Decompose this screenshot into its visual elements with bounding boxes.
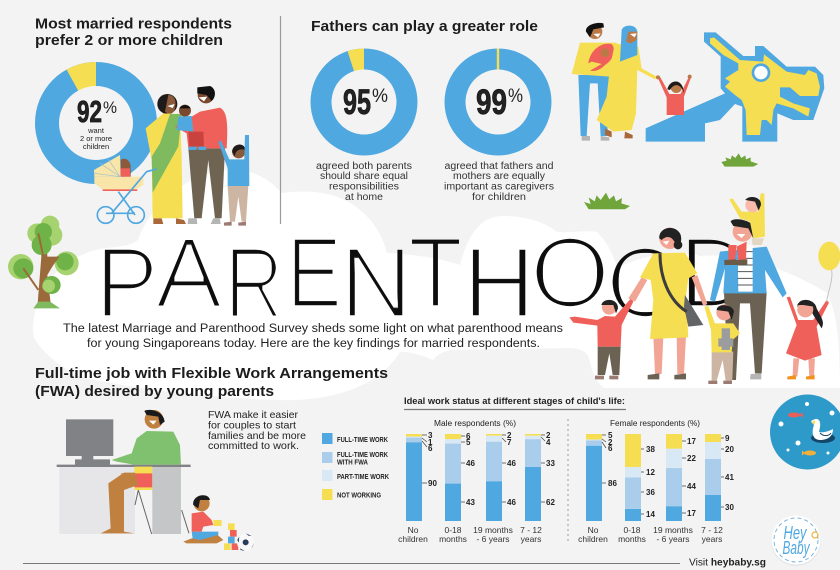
FWA text bbox=[208, 409, 306, 452]
boy waving bbox=[218, 135, 249, 226]
title: T bbox=[408, 217, 463, 329]
donut chart: 99%: 99 bbox=[476, 83, 507, 122]
man working bbox=[101, 410, 181, 534]
title: N bbox=[340, 227, 412, 339]
donut chart: 92%: % bbox=[103, 98, 117, 117]
child with blocks bbox=[183, 495, 238, 550]
heading: FWA: (FWA) desired by young parents bbox=[35, 383, 274, 400]
legend: FULL-TIME WORK bbox=[337, 452, 388, 459]
donut chart: 92%: want bbox=[87, 126, 105, 135]
bar chart: female respondents: 36 bbox=[646, 488, 655, 497]
bar chart: male respondents: 2 bbox=[507, 431, 512, 440]
text: both parents bbox=[316, 161, 412, 203]
bar chart: female respondents: No bbox=[588, 525, 599, 535]
bar chart: male respondents: 46 bbox=[466, 459, 475, 468]
bar chart: female respondents: 9 bbox=[725, 434, 730, 443]
intro text: The latest Marriage and Parenthood Survey sheds some light on what parenthood means bbox=[63, 323, 563, 335]
intro text bbox=[63, 323, 563, 350]
text: equal caregivers bbox=[444, 161, 554, 203]
bar chart: male respondents: 43 bbox=[466, 498, 475, 507]
donut chart: 95%: 95 bbox=[343, 83, 371, 122]
bar chart: female respondents: 20 bbox=[725, 445, 734, 454]
title: A bbox=[155, 217, 223, 329]
Hey Baby badge bbox=[771, 516, 821, 566]
man holding baby bbox=[175, 86, 227, 224]
woman in sari bbox=[146, 94, 186, 224]
boy in red bbox=[569, 298, 633, 379]
bar chart: female respondents: 5 bbox=[608, 431, 613, 440]
bar chart: female respondents: 6 bbox=[608, 444, 613, 453]
bar chart: female respondents: 30 bbox=[725, 503, 734, 512]
bar chart: male respondents: 62 bbox=[546, 498, 555, 507]
text: equal caregivers: for children bbox=[472, 192, 526, 203]
bar chart: female respondents: 2 bbox=[608, 438, 613, 447]
bar chart: female respondents: children bbox=[578, 534, 608, 544]
FWA text: families and be more bbox=[208, 430, 306, 442]
bar chart: female respondents: 17 bbox=[687, 437, 696, 446]
heading: children preference: Most married respondents bbox=[35, 16, 232, 32]
bar chart: male respondents: 33 bbox=[546, 459, 555, 468]
illustration: family and dragon playground bbox=[572, 23, 824, 209]
girl in red dress bbox=[786, 297, 829, 379]
bar chart: male respondents bbox=[398, 419, 555, 544]
illustration: family with pram bbox=[94, 86, 249, 226]
FWA text: committed to work. bbox=[208, 440, 299, 452]
FWA text: for couples to start bbox=[208, 420, 296, 432]
heading: fathers: Fathers can play a greater role bbox=[311, 18, 538, 35]
bar chart: male respondents: 4 bbox=[546, 438, 551, 447]
intro text: for young Singaporeans today. Here are the key findings for married respondents. bbox=[87, 338, 540, 350]
title: D bbox=[679, 217, 751, 329]
legend bbox=[322, 433, 389, 500]
title: O bbox=[606, 227, 685, 339]
ball bbox=[237, 533, 254, 551]
grass bbox=[584, 193, 630, 209]
bar chart: female respondents: 86 bbox=[608, 479, 617, 488]
bar chart: female respondents: - 6 years bbox=[656, 534, 690, 544]
legend: FULL-TIME WORK bbox=[337, 437, 388, 444]
text: equal caregivers: important as caregivers bbox=[444, 182, 554, 192]
donut chart: 92%: 2 or more bbox=[80, 134, 112, 143]
donut chart: 92%: children bbox=[83, 142, 109, 151]
bar chart: female respondents: 14 bbox=[646, 510, 655, 519]
bar chart: female respondents: years bbox=[702, 534, 722, 544]
title: E bbox=[286, 217, 342, 329]
bar chart: male respondents: 46 bbox=[507, 459, 516, 468]
donut chart: 95% bbox=[310, 48, 418, 156]
text: both parents: at home bbox=[345, 192, 383, 203]
bar chart: female respondents: 12 bbox=[646, 468, 655, 477]
father with child on shoulders bbox=[710, 193, 787, 380]
footer link: Visit heybaby.sg bbox=[689, 556, 766, 568]
title: R bbox=[224, 227, 284, 339]
bar chart: male respondents: 6 bbox=[466, 432, 471, 441]
grass bbox=[721, 153, 758, 167]
bar chart: male respondents: children bbox=[398, 534, 428, 544]
boy with robot shirt bbox=[704, 304, 740, 384]
bar chart: male respondents: 1 bbox=[428, 438, 433, 447]
chart heading: Ideal work status at different stages of child's life: bbox=[404, 396, 625, 407]
title: H bbox=[463, 227, 535, 339]
heading: children preference: prefer 2 or more children bbox=[35, 32, 223, 49]
dragon slide bbox=[646, 32, 824, 142]
title: O bbox=[530, 217, 610, 329]
legend: WITH FWA bbox=[337, 460, 368, 466]
bar chart: male respondents: 3 bbox=[428, 431, 433, 440]
bar chart: female respondents: 44 bbox=[687, 482, 696, 491]
donut chart: 99%: % bbox=[508, 86, 523, 107]
legend: NOT WORKING bbox=[337, 492, 381, 500]
bar chart: male respondents: 19 months bbox=[473, 525, 513, 535]
bar chart: female respondents: 22 bbox=[687, 454, 696, 463]
bar chart: female respondents bbox=[578, 419, 734, 544]
donut chart: 92% bbox=[35, 62, 157, 184]
bar chart: male respondents: 6 bbox=[428, 444, 433, 453]
donut chart: 92%: 92 bbox=[77, 94, 102, 129]
illustration: family holding hands bbox=[569, 193, 840, 384]
donut chart: 95%: % bbox=[372, 86, 388, 107]
bar chart: male respondents: 7 bbox=[507, 438, 512, 447]
heading: FWA bbox=[35, 365, 388, 400]
bar chart: male respondents: - 6 years bbox=[476, 534, 510, 544]
text: both parents: responsibilities bbox=[329, 182, 399, 192]
text: equal caregivers: mothers are equally bbox=[453, 171, 545, 182]
bar chart: male respondents: Male respondents (%) bbox=[434, 419, 516, 428]
bar chart: female respondents: 0-18 bbox=[623, 525, 641, 535]
bar chart: male respondents: months bbox=[439, 534, 467, 544]
bar chart: female respondents: 7 - 12 bbox=[701, 525, 723, 535]
donut chart: 99% bbox=[444, 48, 552, 156]
text: both parents: agreed both parents bbox=[316, 161, 412, 172]
bar chart: male respondents: No bbox=[408, 525, 419, 535]
legend: PART-TIME WORK bbox=[337, 474, 389, 481]
girl on slide bbox=[656, 75, 692, 115]
text: equal caregivers: agreed that fathers and bbox=[444, 161, 554, 172]
bar chart: female respondents: 41 bbox=[725, 473, 734, 482]
pond with goose bbox=[770, 394, 840, 470]
bar chart: male respondents: 5 bbox=[466, 438, 471, 447]
bar chart: male respondents: 0-18 bbox=[444, 525, 462, 535]
divider bbox=[280, 16, 282, 224]
title bbox=[95, 217, 751, 339]
Hey Baby badge: Baby bbox=[782, 538, 810, 558]
bar chart: female respondents: 19 months bbox=[653, 525, 693, 535]
heading: children preference bbox=[35, 16, 232, 49]
footer line bbox=[23, 562, 680, 564]
text: both parents: should share equal bbox=[320, 171, 408, 182]
bar chart: male respondents: 46 bbox=[507, 498, 516, 507]
father with newborn bbox=[572, 23, 617, 141]
bar chart: male respondents: years bbox=[521, 534, 541, 544]
chart separator bbox=[567, 419, 569, 543]
title: P bbox=[95, 227, 158, 339]
balloon bbox=[818, 242, 840, 302]
desk and computer bbox=[57, 419, 191, 534]
mother in yellow dress bbox=[628, 228, 707, 379]
baby pram bbox=[94, 155, 157, 223]
illustration: parent at desk with child bbox=[57, 410, 254, 551]
Hey Baby badge: Hey bbox=[784, 523, 807, 543]
mother in hijab bbox=[597, 26, 657, 138]
heading: FWA: Full-time job with Flexible Work Arrangements bbox=[35, 365, 388, 382]
bar chart: female respondents: Female respondents (%) bbox=[610, 419, 700, 428]
illustration: tree bbox=[8, 216, 79, 308]
bar chart: male respondents: 7 - 12 bbox=[520, 525, 542, 535]
bar chart: male respondents: 90 bbox=[428, 479, 437, 488]
FWA text: FWA make it easier bbox=[208, 409, 298, 421]
bar chart: female respondents: months bbox=[618, 534, 646, 544]
bar chart: female respondents: 17 bbox=[687, 509, 696, 518]
bar chart: female respondents: 38 bbox=[646, 445, 655, 454]
bar chart: male respondents: 2 bbox=[546, 431, 551, 440]
